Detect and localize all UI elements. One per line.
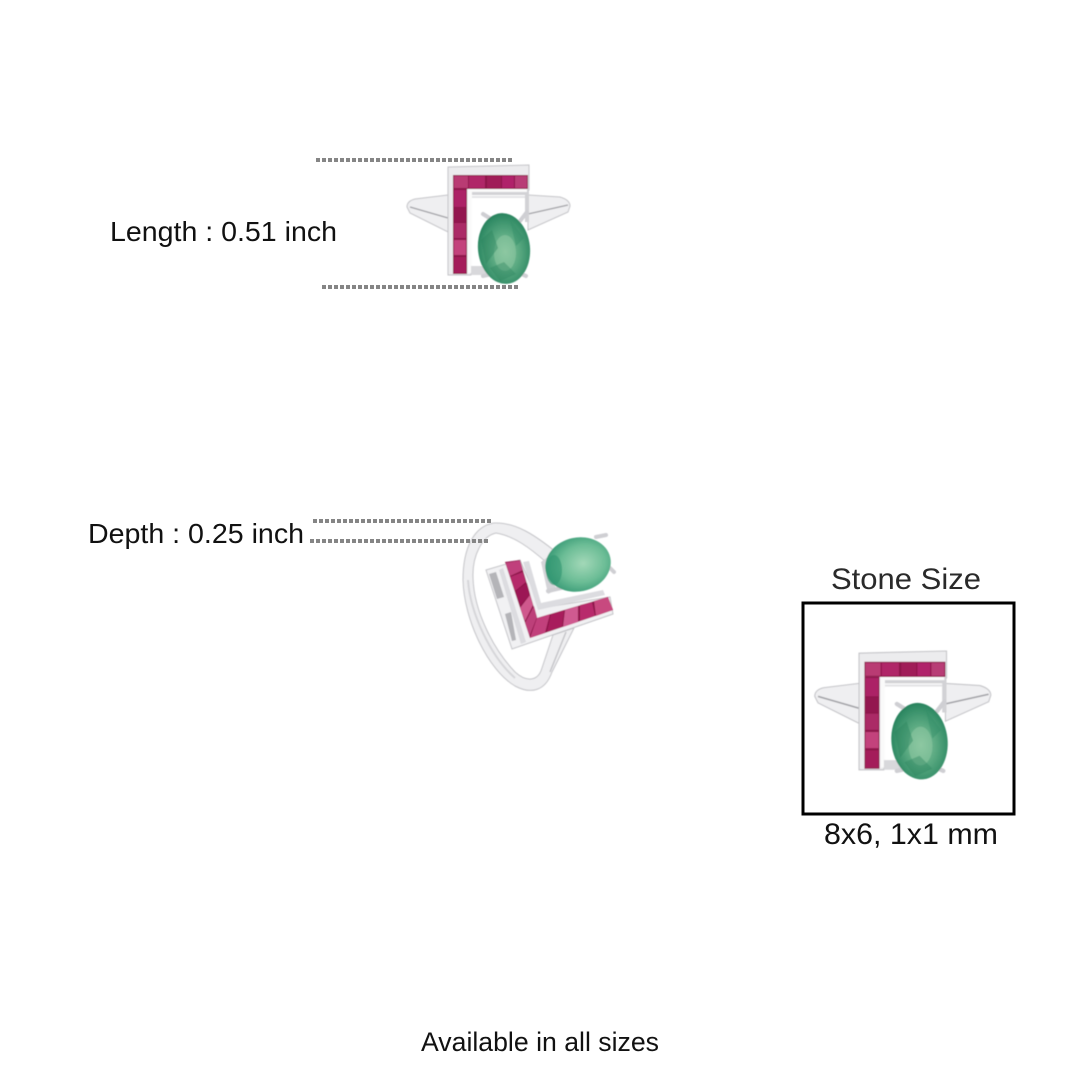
dotted line: length top [316, 158, 512, 162]
label: length: Length : 0.51 inch [110, 216, 337, 247]
label: depth: Depth : 0.25 inch [88, 518, 304, 549]
label: stone dimensions: 8x6, 1x1 mm [824, 818, 998, 851]
footer note: Available in all sizes [421, 1027, 659, 1057]
dotted line: depth top [313, 519, 493, 523]
panel: stone size box [803, 603, 1014, 814]
dotted line: depth bottom [310, 539, 490, 543]
dotted line: length bottom [322, 285, 518, 289]
heading: stone size: Stone Size [831, 563, 981, 596]
ring: front view [407, 165, 570, 287]
ring: angled view [463, 523, 616, 690]
ring: stone size close-up [815, 651, 991, 782]
